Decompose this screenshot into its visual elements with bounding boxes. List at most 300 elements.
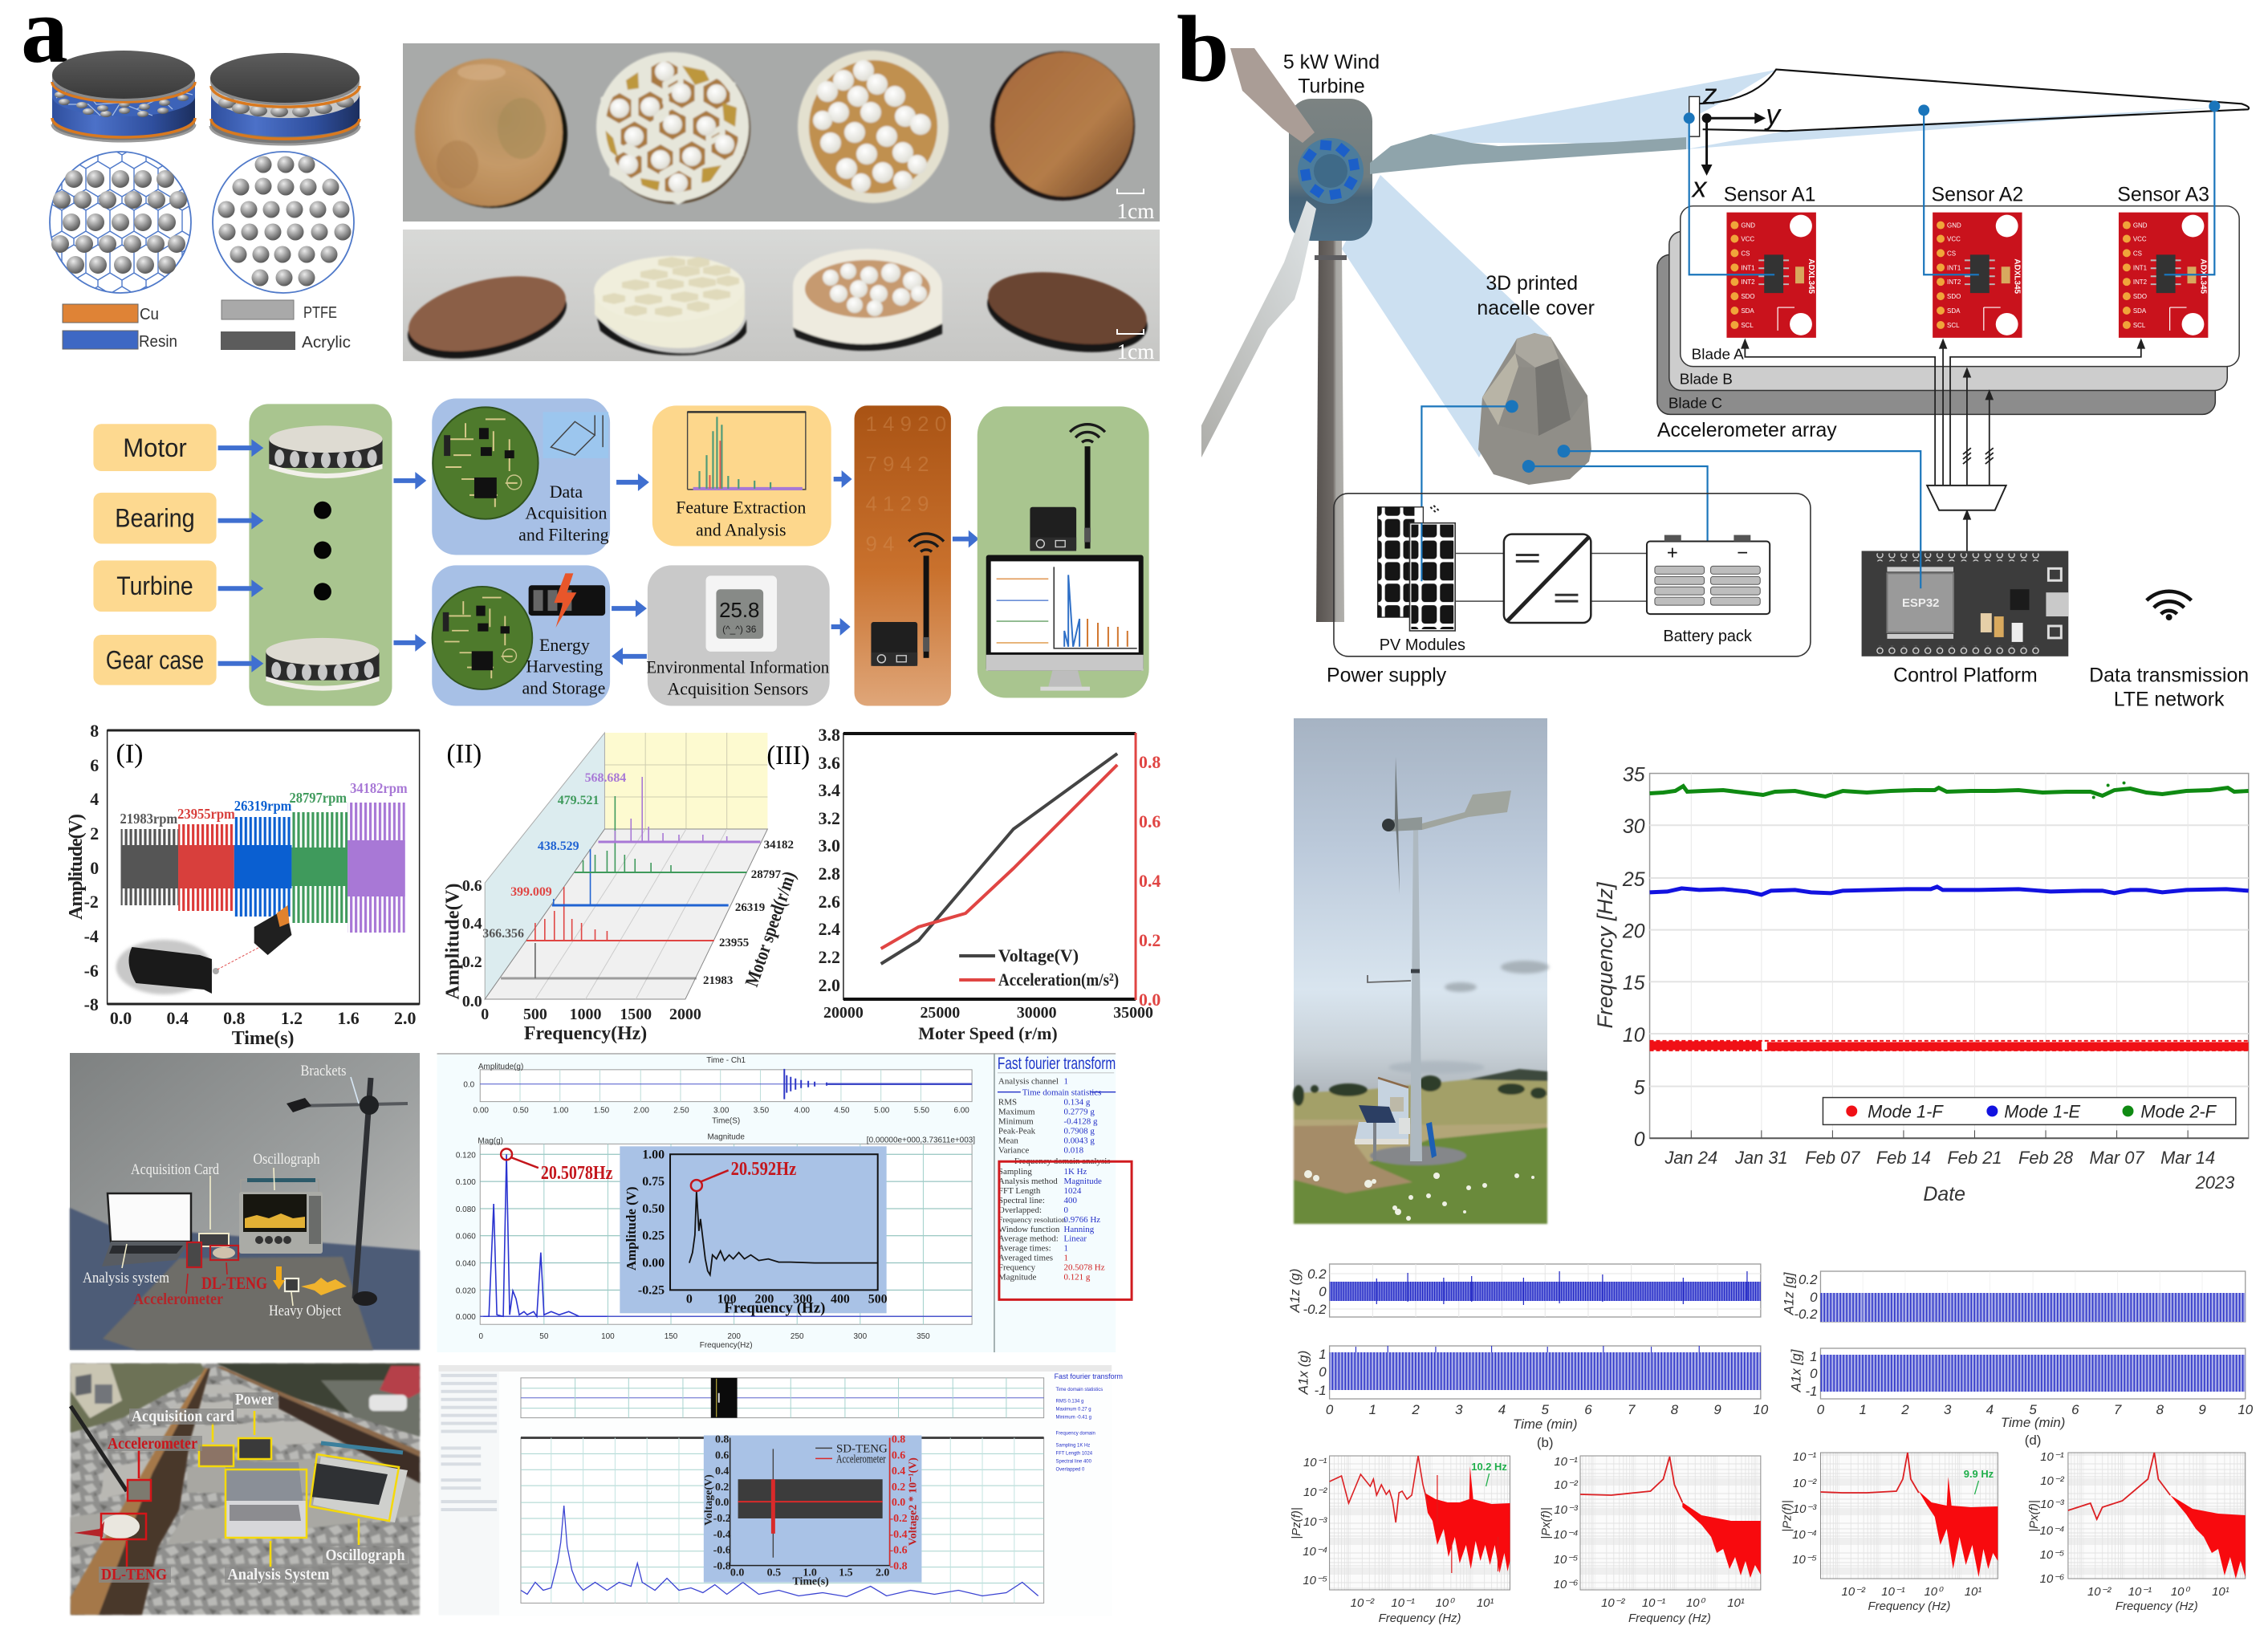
left ticks: 3.0	[819, 835, 840, 856]
energy harvesting panel: Harvesting	[526, 657, 603, 677]
x labels left: 2	[1411, 1402, 1420, 1417]
y axis labels: 20	[1622, 921, 1645, 943]
FFT info side panel: 1	[1064, 1077, 1068, 1087]
PV modules	[1378, 506, 1465, 654]
photo: railway field test	[71, 1364, 420, 1615]
small statistics text: FFT Length 1024	[1056, 1451, 1093, 1456]
magnitude plot: 50	[539, 1332, 549, 1341]
inset voltage chart: -0.6	[890, 1545, 908, 1557]
power supply box	[1327, 494, 1811, 687]
rpm labels: 21983rpm	[120, 811, 177, 827]
y axis ticks: 2	[90, 823, 99, 843]
FFT info side panel: FFT Length	[998, 1186, 1041, 1196]
time history plots	[1287, 1264, 2254, 1450]
small statistics text: Overlapped 0	[1056, 1467, 1085, 1472]
equipment hut	[1355, 1078, 1410, 1161]
date labels: Feb 28	[2018, 1148, 2074, 1168]
FFT info side panel: Magnitude	[1064, 1177, 1102, 1186]
FFT info side panel: Average times:	[998, 1244, 1051, 1254]
wifi icon and network label: Data transmission	[2089, 665, 2249, 687]
amplitude ticks	[462, 877, 482, 1010]
DC DC converter	[1504, 535, 1591, 623]
rail labels: Oscillograph	[326, 1547, 404, 1564]
heavy object and impact	[273, 1266, 347, 1295]
lab labels: Acquisition Card	[131, 1161, 219, 1178]
peak labels: 366.356	[482, 927, 524, 941]
rail labels: DL-TENG	[101, 1566, 167, 1583]
y axis ticks: 6	[90, 755, 99, 775]
second copper electrode	[990, 51, 1135, 201]
spectrum Pz right: |Pz(f)|	[1781, 1500, 1794, 1532]
inset chart: 300	[793, 1292, 812, 1306]
FFT info side panel: 0	[1064, 1205, 1069, 1215]
vibration source labels: Turbine	[116, 571, 193, 600]
spectrum Pz right: 10¹	[1965, 1585, 1981, 1599]
date labels: Feb 14	[1876, 1148, 1931, 1168]
accelerometer array: Accelerometer array	[1657, 419, 1837, 441]
y labels right: 0	[1810, 1366, 1818, 1381]
DL-TENG and cards	[187, 1234, 238, 1267]
sensor A1: GND	[1741, 222, 1755, 230]
blade outline with axes	[1689, 70, 2249, 204]
magnitude plot: 300	[854, 1332, 868, 1341]
left ticks: 3.6	[819, 753, 840, 773]
FFT info side panel: Peak-Peak	[998, 1126, 1036, 1136]
sensor A1: SDO	[1741, 293, 1755, 300]
sensor A3	[2119, 213, 2208, 338]
feature extraction panel: and Analysis	[696, 521, 786, 540]
x labels left: 10	[1753, 1402, 1769, 1417]
nacelle body	[1289, 99, 1372, 241]
yellow back wall	[604, 733, 767, 829]
laptop	[102, 1193, 191, 1266]
peak labels: 479.521	[558, 794, 599, 807]
voltage line	[881, 754, 1117, 964]
tilted copper disc	[400, 263, 574, 372]
magnitude plot: [0.00000e+000,3.73611e+003]	[867, 1136, 975, 1144]
y labels right: 1	[1810, 1349, 1817, 1364]
time plot: 0.00	[474, 1107, 489, 1116]
hygrometer icon	[705, 575, 777, 652]
inset chart: 0	[686, 1292, 693, 1306]
date labels: Feb 07	[1805, 1148, 1860, 1168]
spectrum Pz right: 10⁻¹	[1793, 1450, 1816, 1464]
magnitude plot: 0.120	[456, 1151, 476, 1160]
blade outline with axes: z	[1702, 78, 1717, 110]
sensor A3: INT2	[2133, 278, 2148, 286]
right ticks: 0.4	[1139, 871, 1160, 891]
lab labels	[83, 1063, 347, 1319]
photo: top view of device parts	[403, 43, 1160, 223]
small statistics text: Sampling 1K Hz	[1056, 1443, 1090, 1448]
date labels: Jan 24	[1664, 1148, 1717, 1168]
spectrum Px right: 10⁻³	[2040, 1498, 2065, 1511]
y axis labels: 30	[1623, 815, 1645, 838]
x labels left: 9	[1713, 1402, 1721, 1417]
small statistics text: RMS 0.134 g	[1056, 1400, 1083, 1404]
rpm labels: 26319rpm	[234, 798, 291, 814]
chart III: voltage and acceleration vs speed	[766, 725, 1160, 1043]
inset chart: 1.00	[642, 1148, 665, 1161]
FFT info side panel: Window function	[998, 1225, 1060, 1234]
y axis labels: 5	[1634, 1077, 1645, 1100]
spectrum Px right: 10⁻¹	[2040, 1450, 2064, 1464]
legend: Acceleration(m/s²)	[998, 969, 1119, 990]
cover label: nacelle cover	[1477, 297, 1595, 319]
chart II: 3D waterfall spectrum: Amplitude(V)	[442, 883, 463, 1000]
FFT info side panel: Frequency	[998, 1263, 1036, 1273]
photo: lab setup: Accelerometer	[133, 1291, 223, 1308]
frequency ticks	[481, 1006, 701, 1023]
motor and laser tachometer	[116, 905, 291, 994]
wifi icon and network label	[2089, 591, 2249, 710]
data acquisition panel	[432, 398, 610, 555]
FFT info side panel: 20.5078 Hz	[1064, 1263, 1105, 1273]
energy harvesting panel	[432, 565, 610, 705]
inset voltage chart: 2.0	[876, 1567, 889, 1579]
inset voltage chart: 1.5	[839, 1567, 853, 1579]
magnitude plot: 250	[791, 1332, 804, 1341]
ground	[1293, 1069, 1547, 1224]
inset voltage chart: 1.0	[803, 1567, 817, 1579]
magnitude plot: 0	[478, 1332, 483, 1341]
date labels: Mar 14	[2160, 1148, 2215, 1168]
sensor A1: SDA	[1741, 307, 1754, 315]
A1x right plot	[1820, 1348, 2246, 1399]
y axis ticks	[84, 721, 99, 1014]
FFT info side panel: 0.0043 g	[1064, 1136, 1095, 1145]
FFT info side panel: 0.134 g	[1064, 1098, 1091, 1108]
y labels right	[1794, 1272, 1818, 1399]
spectrum Pz right: 10⁻⁴	[1792, 1528, 1817, 1542]
inset voltage chart: -0.8	[713, 1561, 731, 1573]
inset chart: -0.25	[638, 1283, 665, 1297]
magnitude plot	[456, 1132, 975, 1350]
FFT info side panel: RMS	[998, 1098, 1017, 1108]
blue floor	[70, 1208, 420, 1350]
x axis ticks	[110, 1008, 416, 1028]
inset chart: 100	[717, 1292, 737, 1306]
inset voltage chart: 0.8	[892, 1433, 905, 1445]
FFT info side panel	[994, 1054, 1132, 1352]
FFT info side panel: Averaged times	[998, 1254, 1053, 1263]
monitor	[986, 555, 1144, 691]
sensor A3: SCL	[2133, 322, 2146, 329]
spectrum Px left: 10⁻¹	[1642, 1596, 1665, 1610]
sensor labels: Sensor A2	[1931, 184, 2023, 206]
wire endpoint dots	[1506, 100, 2220, 473]
top time plot	[521, 1378, 1044, 1418]
FFT info side panel: Fast fourier transform	[998, 1055, 1116, 1073]
y axis ticks: -4	[84, 926, 99, 946]
plot frame	[843, 733, 1136, 1000]
speed labels: 34182	[764, 839, 794, 852]
spectrum Px left: Frequency (Hz)	[1628, 1612, 1711, 1625]
sensor A3: ADXL345	[2198, 258, 2207, 295]
y axis ticks: -2	[84, 892, 99, 912]
inset voltage chart: 0.5	[767, 1567, 781, 1579]
x labels right: Time (min)	[2001, 1415, 2065, 1430]
sensor A3: VCC	[2133, 235, 2147, 242]
battery pack: Battery pack	[1663, 628, 1752, 645]
date labels: Mar 07	[2090, 1148, 2144, 1168]
rpm labels: 28797rpm	[289, 790, 347, 806]
spectrum Pz right: 9.9 Hz	[1964, 1468, 1994, 1480]
x labels left: 1	[1369, 1402, 1376, 1417]
spectrum Pz left: 10⁻²	[1351, 1596, 1375, 1610]
turbine label: 5 kW Wind	[1283, 51, 1380, 74]
magnitude plot: 200	[727, 1332, 741, 1341]
small statistics text	[1055, 1372, 1123, 1472]
top view honeycomb circle	[50, 152, 191, 293]
scale bar	[1117, 329, 1154, 364]
x labels left: 5	[1542, 1402, 1550, 1417]
honeycomb frame oblique	[593, 254, 746, 356]
FFT info side panel: Linear	[1064, 1234, 1087, 1244]
y labels left: 0	[1319, 1284, 1327, 1299]
magnitude plot: 150	[665, 1332, 678, 1341]
environmental sensor panel: Acquisition Sensors	[667, 680, 808, 699]
chart I: amplitude vs time: Amplitude(V)	[66, 814, 87, 920]
sleepers	[71, 1384, 420, 1547]
FFT info side panel: Frequency domain analysis	[1014, 1156, 1111, 1166]
lab labels: Analysis system	[83, 1270, 169, 1287]
sensor labels: Sensor A1	[1724, 184, 1816, 206]
time plot: 2.50	[673, 1107, 689, 1116]
frequency ticks: 0	[481, 1006, 489, 1023]
spectrum Pz left: 10⁻³	[1303, 1515, 1327, 1529]
inset voltage chart: 0.4	[715, 1465, 729, 1478]
axis names: A1x [g]	[1789, 1348, 1804, 1392]
spectrum Px right: 10¹	[2212, 1585, 2229, 1599]
FFT info side panel: 0.018	[1064, 1145, 1084, 1155]
honeycomb frame with balls	[596, 52, 750, 204]
steel table	[103, 1257, 373, 1350]
time plot: 3.50	[754, 1107, 770, 1116]
accelerometer array: Blade C	[1668, 395, 1722, 412]
speed labels: 28797	[751, 868, 782, 881]
inset chart: 200	[754, 1292, 774, 1306]
FFT info side panel: 1	[1064, 1244, 1068, 1254]
time plot: 5.50	[914, 1107, 930, 1116]
inset chart: 0.00	[642, 1257, 665, 1270]
spectrum Pz left: 10¹	[1477, 1596, 1494, 1610]
x labels left: 7	[1628, 1402, 1636, 1417]
inset voltage chart: SD-TENG	[836, 1442, 888, 1455]
random disc rendering	[210, 53, 360, 144]
inset voltage chart: -0.2	[890, 1513, 908, 1525]
x labels left: 6	[1584, 1402, 1592, 1417]
sensor A1: INT1	[1741, 264, 1755, 271]
inset voltage chart	[703, 1433, 921, 1588]
frequency ticks: 1000	[570, 1006, 601, 1023]
vibration source labels	[93, 424, 217, 685]
battery pack	[1647, 535, 1770, 645]
materials legend	[63, 300, 351, 352]
3D printed nacelle cover	[1478, 333, 1591, 485]
inset chart: Amplitude (V)	[624, 1186, 639, 1270]
ESP32 control platform: ESP32	[1902, 596, 1939, 610]
spectrum Pz right: 10⁻²	[1793, 1477, 1817, 1490]
speed labels: 26319	[735, 901, 765, 914]
time plot: 0.0	[463, 1081, 475, 1090]
blade C board	[1657, 254, 2215, 414]
A1x left plot	[1330, 1346, 1761, 1399]
PV modules: PV Modules	[1380, 636, 1465, 654]
left ticks: 3.4	[819, 780, 840, 800]
rail labels: Accelerometer	[108, 1435, 197, 1453]
inset chart: 500	[868, 1292, 888, 1306]
date labels: 2023	[2195, 1173, 2234, 1193]
instruments	[71, 1406, 408, 1539]
FFT info side panel: 400	[1064, 1196, 1077, 1205]
FFT info side panel: -0.4128 g	[1064, 1116, 1098, 1126]
schematic layer	[1283, 51, 2249, 710]
inset chart: Frequency (Hz)	[724, 1299, 825, 1316]
spectrum Px right: 10⁰	[2171, 1585, 2190, 1599]
FFT info side panel: Analysis channel	[998, 1077, 1059, 1087]
plot frame	[108, 730, 420, 1004]
rail labels: Power	[235, 1391, 274, 1408]
peak callout: 20.5078Hz	[541, 1163, 613, 1184]
spectrum Pz right: 10⁻¹	[1881, 1585, 1905, 1599]
sensor labels	[1724, 184, 2209, 206]
x labels left: 3	[1455, 1402, 1463, 1417]
legend: Voltage(V)	[998, 945, 1079, 965]
FFT info side panel: 1	[1064, 1254, 1068, 1263]
x labels right: 3	[1944, 1402, 1952, 1417]
spectrum Px left: 10⁻²	[1554, 1478, 1579, 1492]
left ticks: 2.4	[819, 919, 840, 939]
feature extraction panel: Feature Extraction	[676, 498, 806, 518]
bottom ticks: 30000	[1017, 1004, 1057, 1022]
lower blade	[1201, 201, 1316, 457]
materials legend: PTFE	[303, 304, 337, 322]
x labels right: 0	[1817, 1402, 1825, 1417]
feature extraction panel	[652, 405, 831, 547]
right ticks	[1139, 752, 1160, 1010]
frequency tracking chart	[1593, 764, 2249, 1205]
x labels right: 4	[1986, 1402, 1994, 1417]
magnitude plot: Magnitude	[707, 1132, 745, 1141]
time plot: 5.00	[874, 1107, 890, 1116]
x labels right: 10	[2238, 1402, 2254, 1417]
spectrum Pz left	[1290, 1456, 1510, 1625]
clouds	[1388, 961, 1549, 1074]
axis names	[1287, 1269, 1804, 1395]
grid and frame	[1650, 774, 2249, 1138]
lab labels: Brackets	[300, 1063, 347, 1079]
legend	[959, 945, 1119, 990]
right ticks: 0.0	[1139, 990, 1160, 1010]
time plot: 6.00	[953, 1107, 969, 1116]
inset voltage chart: -0.4	[713, 1529, 731, 1541]
sensor A1: INT2	[1741, 278, 1755, 286]
peak labels: 568.684	[585, 771, 626, 785]
x labels right: 5	[2029, 1402, 2037, 1417]
blade A board	[1681, 206, 2239, 367]
x labels left: Time (min)	[1513, 1417, 1578, 1432]
data acquisition panel: Acquisition	[525, 504, 607, 523]
spectrum Px left: 10⁻⁵	[1554, 1553, 1578, 1567]
hygrometer icon: 25.8	[719, 600, 759, 622]
inset voltage chart: -0.8	[890, 1561, 908, 1573]
x labels left	[1326, 1402, 1769, 1450]
FFT info side panel: 0.7908 g	[1064, 1126, 1095, 1136]
inset voltage chart: 0.0	[892, 1497, 905, 1509]
peak callout	[501, 1148, 613, 1184]
top view random circle	[213, 152, 354, 293]
amplitude ticks: 0.2	[462, 953, 482, 971]
inset voltage chart: 0.2	[715, 1482, 729, 1494]
inset chart	[620, 1146, 888, 1316]
oscilloscope	[239, 1178, 323, 1254]
accelerometer array	[1657, 184, 2239, 441]
time plot: 0.50	[513, 1107, 529, 1116]
blue side wall	[485, 733, 604, 999]
small statistics text: Minimum -0.41 g	[1056, 1416, 1091, 1421]
y axis ticks: 8	[90, 721, 99, 741]
magnitude plot: 0.000	[456, 1313, 476, 1322]
photo: lab setup: DL-TENG	[201, 1273, 267, 1293]
spectrum Pz right: 10⁻²	[1842, 1585, 1866, 1599]
vibration source labels: Bearing	[115, 503, 195, 533]
spectrum Pz left: 10.2 Hz	[1471, 1461, 1507, 1473]
FFT info side panel: Average method:	[998, 1234, 1059, 1244]
main spectrum plot	[521, 1437, 1044, 1603]
magnitude plot: 0.020	[456, 1287, 476, 1295]
wireless transmitter panel	[855, 405, 951, 705]
spectrum Pz left: Frequency (Hz)	[1379, 1612, 1461, 1625]
scale bar: 1cm	[1117, 339, 1154, 364]
frequency ticks: 1500	[620, 1006, 652, 1023]
tower	[1316, 241, 1344, 622]
y labels left: 0.2	[1307, 1266, 1327, 1282]
chart II: 3D waterfall spectrum: (II)	[446, 739, 482, 769]
y labels left: -0.2	[1303, 1302, 1327, 1317]
legend: Mode 1-F	[1868, 1101, 1944, 1121]
power spectra	[1290, 1450, 2246, 1625]
spectrum Px right	[2027, 1450, 2246, 1613]
time plot: 2.00	[634, 1107, 649, 1116]
x labels left: 0	[1326, 1402, 1334, 1417]
FFT info side panel: Variance	[998, 1145, 1029, 1155]
hub with solar cells	[1298, 138, 1364, 204]
wireless transmitter panel: 1 4 9 2 0	[865, 413, 946, 436]
magnitude plot: 100	[601, 1332, 615, 1341]
inset chart: 20.592Hz	[731, 1159, 797, 1180]
annotation arrows	[122, 1077, 359, 1306]
wifi icon and network label: LTE network	[2114, 688, 2225, 710]
wind turbine rendering	[1201, 48, 1686, 622]
spectrum Pz right: Frequency (Hz)	[1868, 1600, 1950, 1613]
A1z left plot	[1330, 1264, 1761, 1317]
time plot: 4.00	[795, 1107, 810, 1116]
x axis ticks: 0.0	[110, 1008, 132, 1028]
photo: lab setup	[70, 1053, 420, 1350]
y axis ticks: 0	[90, 858, 99, 878]
mode 2-F trace	[1650, 787, 2249, 796]
magnitude plot: 0.040	[456, 1260, 476, 1269]
light blue projection wedges	[1342, 70, 2217, 457]
energy harvesting panel: and Storage	[522, 679, 605, 698]
date labels	[1664, 1148, 2234, 1193]
sensor A1: SCL	[1741, 322, 1754, 329]
FFT info side panel: Analysis method	[998, 1177, 1058, 1186]
frequency ticks: 2000	[669, 1006, 701, 1023]
frequency tracking chart: Frequency [Hz]	[1593, 882, 1617, 1029]
y labels left	[1303, 1266, 1327, 1398]
